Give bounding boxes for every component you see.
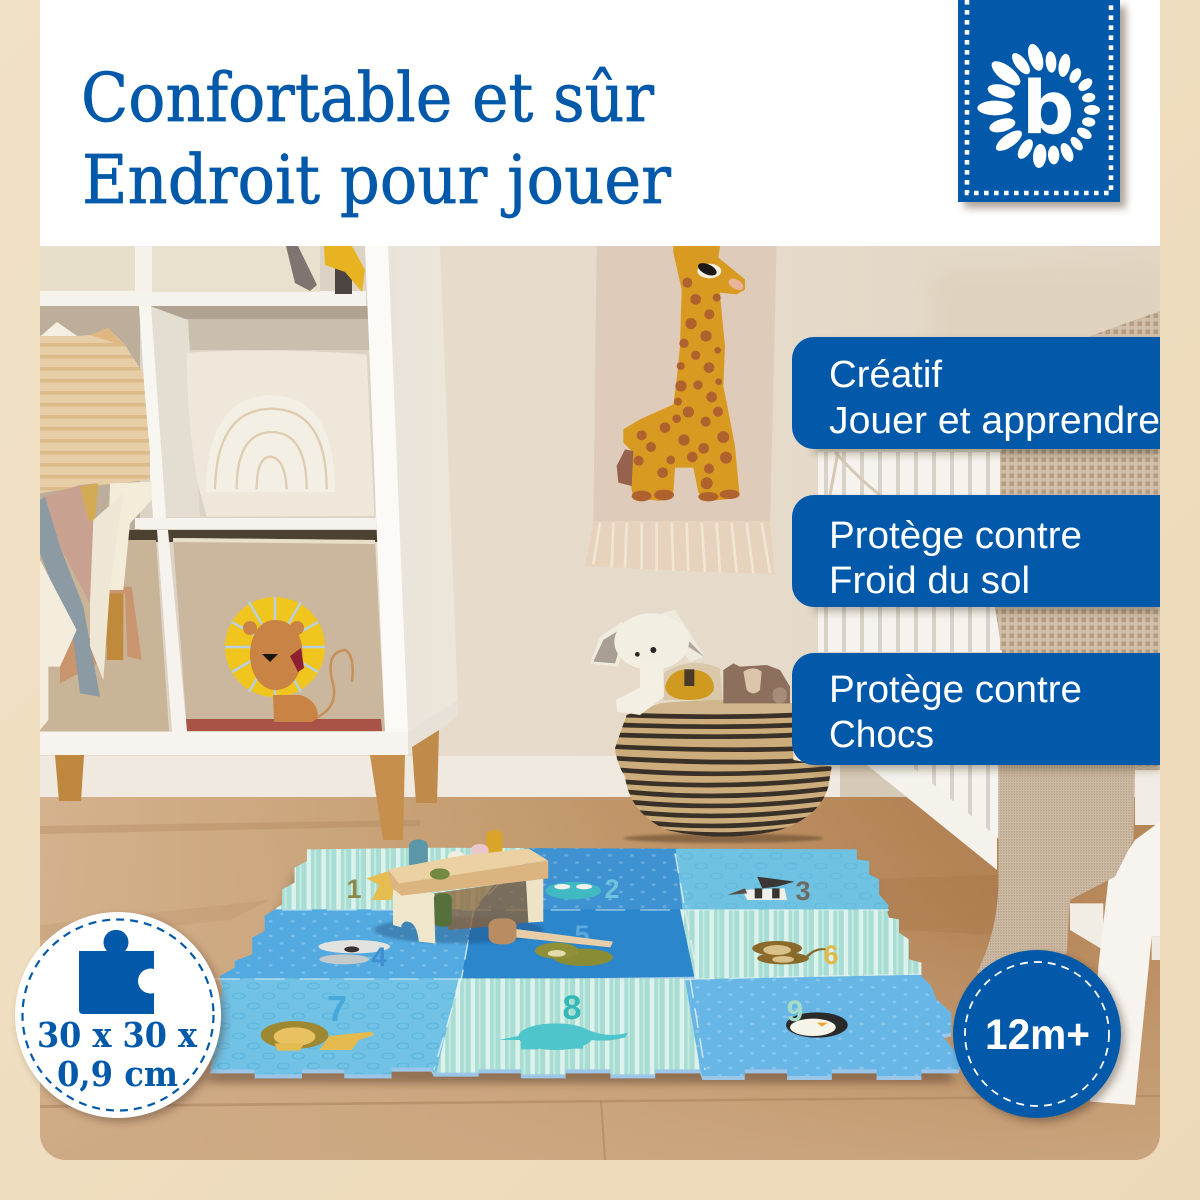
mat numbers: 1 [346,874,362,904]
callout: froid du sol: Protège contre [829,515,1082,557]
toy frame [388,848,548,943]
title: Confortable et sûr [81,59,655,137]
title [81,59,672,219]
peg pink [471,844,489,875]
mat numbers: 8 [563,989,581,1027]
plush bear [723,663,790,703]
mat animals [261,872,848,1051]
white crib [818,452,1160,1105]
callout: froid du sol: Froid du sol [829,560,1030,602]
mat numbers: 2 [604,874,620,904]
top row storage baskets [40,246,365,294]
badge: age: 12m+ [985,1011,1090,1059]
white balls [448,851,525,867]
title: Endroit pour jouer [82,141,672,219]
rainbow cotton basket [187,351,374,517]
woven basket [590,610,837,843]
lion storage box [173,538,385,731]
mat numbers: 7 [327,988,347,1029]
wall [40,246,1170,806]
callout: créatif: Jouer et apprendre [829,400,1160,442]
animal: small giraffe [367,872,397,900]
mat numbers [327,874,839,1029]
folded blanket [40,482,152,730]
animal: bear [535,943,613,966]
callout: chocs [792,653,1160,770]
white header panel [40,0,1160,246]
callout: créatif: Créatif [829,354,942,396]
badge: tile size: 0,9 cm [57,1054,178,1095]
hammer [489,918,613,947]
giraffe wall hanging [585,246,777,574]
mat numbers: 4 [371,942,387,972]
animal: monkey [752,941,828,964]
badge: tile size [15,912,225,1122]
callout: froid du sol [792,495,1160,612]
shelf unit [40,246,458,840]
photo: nursery scene [40,246,1170,1160]
animal: elephant [498,1023,628,1050]
badge: age [953,950,1125,1122]
waffle blanket [977,311,1160,973]
mat numbers: 3 [795,876,811,906]
mat seams [210,853,921,1070]
animal: koala [318,940,390,964]
striped pillow [40,322,150,493]
basket body [615,700,832,836]
callout: chocs: Chocs [829,714,934,756]
wooden pounding toy [374,830,613,947]
badge: tile size: 30 x 30 x [37,1015,198,1056]
baseboard [40,756,840,797]
mat numbers: 5 [574,920,590,950]
callout: chocs: Protège contre [829,669,1082,711]
plush elephant [590,610,705,715]
brand logo tag [958,0,1126,208]
animal: lion [261,1021,374,1051]
plush lion [663,663,723,700]
animal: owl [545,882,601,899]
animal: penguin [786,1012,848,1038]
mat numbers: 9 [787,995,803,1028]
icon: puzzle piece [79,930,154,1014]
foam play mat [200,843,996,1083]
animal: zebra [727,877,795,900]
mat side edge [210,852,961,1080]
left storage box [40,540,169,731]
peg yellow [486,830,502,853]
callout: créatif [792,337,1160,454]
brand logo tag: b [1022,66,1074,151]
peg teal [409,839,428,869]
mat tiles [210,848,960,1076]
wooden floor [40,797,1160,1160]
mat numbers: 6 [823,940,839,970]
